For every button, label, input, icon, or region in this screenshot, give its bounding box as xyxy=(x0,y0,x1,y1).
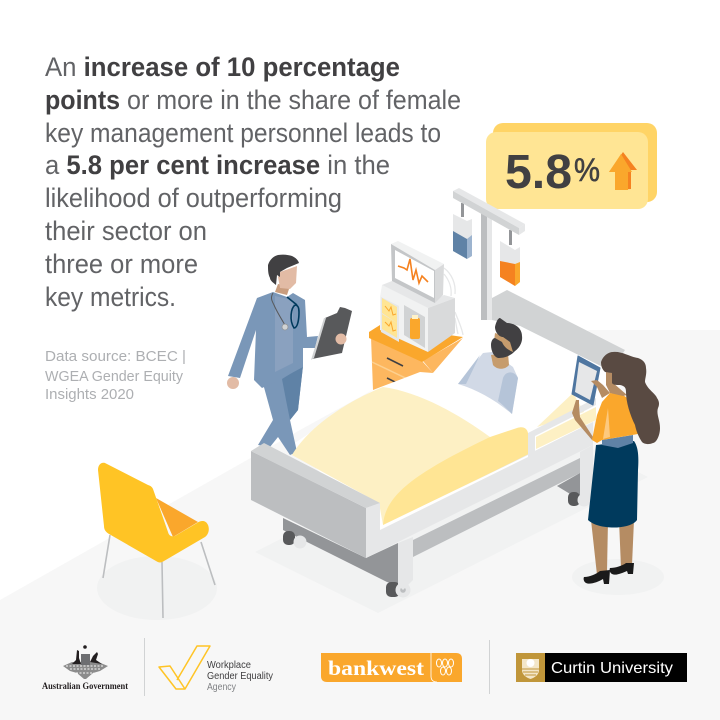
data source note: Insights 2020 xyxy=(45,387,134,403)
logo: Workplace Gender Equality Agency: Agency xyxy=(207,682,236,693)
crest xyxy=(63,645,108,679)
doctor xyxy=(227,255,352,455)
headline text: points or more in the share of female xyxy=(45,85,461,115)
headline text: key management personnel leads to xyxy=(45,118,441,148)
data source note xyxy=(45,349,186,403)
icon: blue IV bag xyxy=(453,214,472,259)
headline text: An increase of 10 percentage xyxy=(45,52,400,82)
headline text: key metrics. xyxy=(45,282,176,312)
wheels xyxy=(283,492,590,598)
patient monitor xyxy=(380,241,463,352)
bedside table xyxy=(369,325,463,395)
headline text: likelihood of outperforming xyxy=(45,183,342,213)
arm xyxy=(572,400,593,440)
logo: Workplace Gender Equality Agency: Workplace xyxy=(207,660,251,671)
nurse with tablet xyxy=(572,352,664,595)
mattress and pillow xyxy=(292,320,625,530)
logo: Curtin University xyxy=(516,653,687,682)
side rail xyxy=(528,393,596,456)
icon: orange IV bag xyxy=(500,241,520,286)
hair xyxy=(601,352,660,444)
clipboard xyxy=(311,307,352,360)
data source note: Data source: BCEC | xyxy=(45,349,186,365)
skirt xyxy=(588,441,638,528)
logo: Australian Government: Australian Government xyxy=(42,682,129,692)
headline text xyxy=(45,52,461,312)
raised arm xyxy=(591,380,610,398)
logo: Australian Government xyxy=(42,645,129,692)
IV pole with bags xyxy=(453,188,525,320)
headline text: three or more xyxy=(45,249,198,279)
tablet xyxy=(572,356,600,405)
chair xyxy=(97,463,217,620)
legs and shoes xyxy=(584,520,634,584)
floor shadow under bed xyxy=(255,415,648,613)
bed frame xyxy=(251,387,596,598)
icon: up arrow xyxy=(609,152,637,190)
footer dividers xyxy=(144,638,490,696)
logo: Workplace Gender Equality Agency xyxy=(159,646,273,693)
headboard xyxy=(492,290,625,372)
blanket xyxy=(292,387,528,525)
logo: Curtin University: Curtin University xyxy=(551,660,673,677)
logo: Workplace Gender Equality Agency: Gender Equality xyxy=(207,671,273,682)
headline text: a 5.8 per cent increase in the xyxy=(45,150,390,180)
logo: Bankwest xyxy=(321,653,462,682)
top xyxy=(592,393,638,443)
floor background xyxy=(0,330,720,720)
patient xyxy=(458,318,522,414)
callout: 5.8% increase: 5.8 xyxy=(505,146,572,199)
callout: 5.8% increase: % xyxy=(574,152,600,188)
headline text: their sector on xyxy=(45,216,207,246)
data source note: WGEA Gender Equity xyxy=(45,369,184,385)
stethoscope xyxy=(271,293,299,330)
callout: 5.8% increase xyxy=(486,123,657,209)
logo: Bankwest: bankwest xyxy=(328,656,424,680)
